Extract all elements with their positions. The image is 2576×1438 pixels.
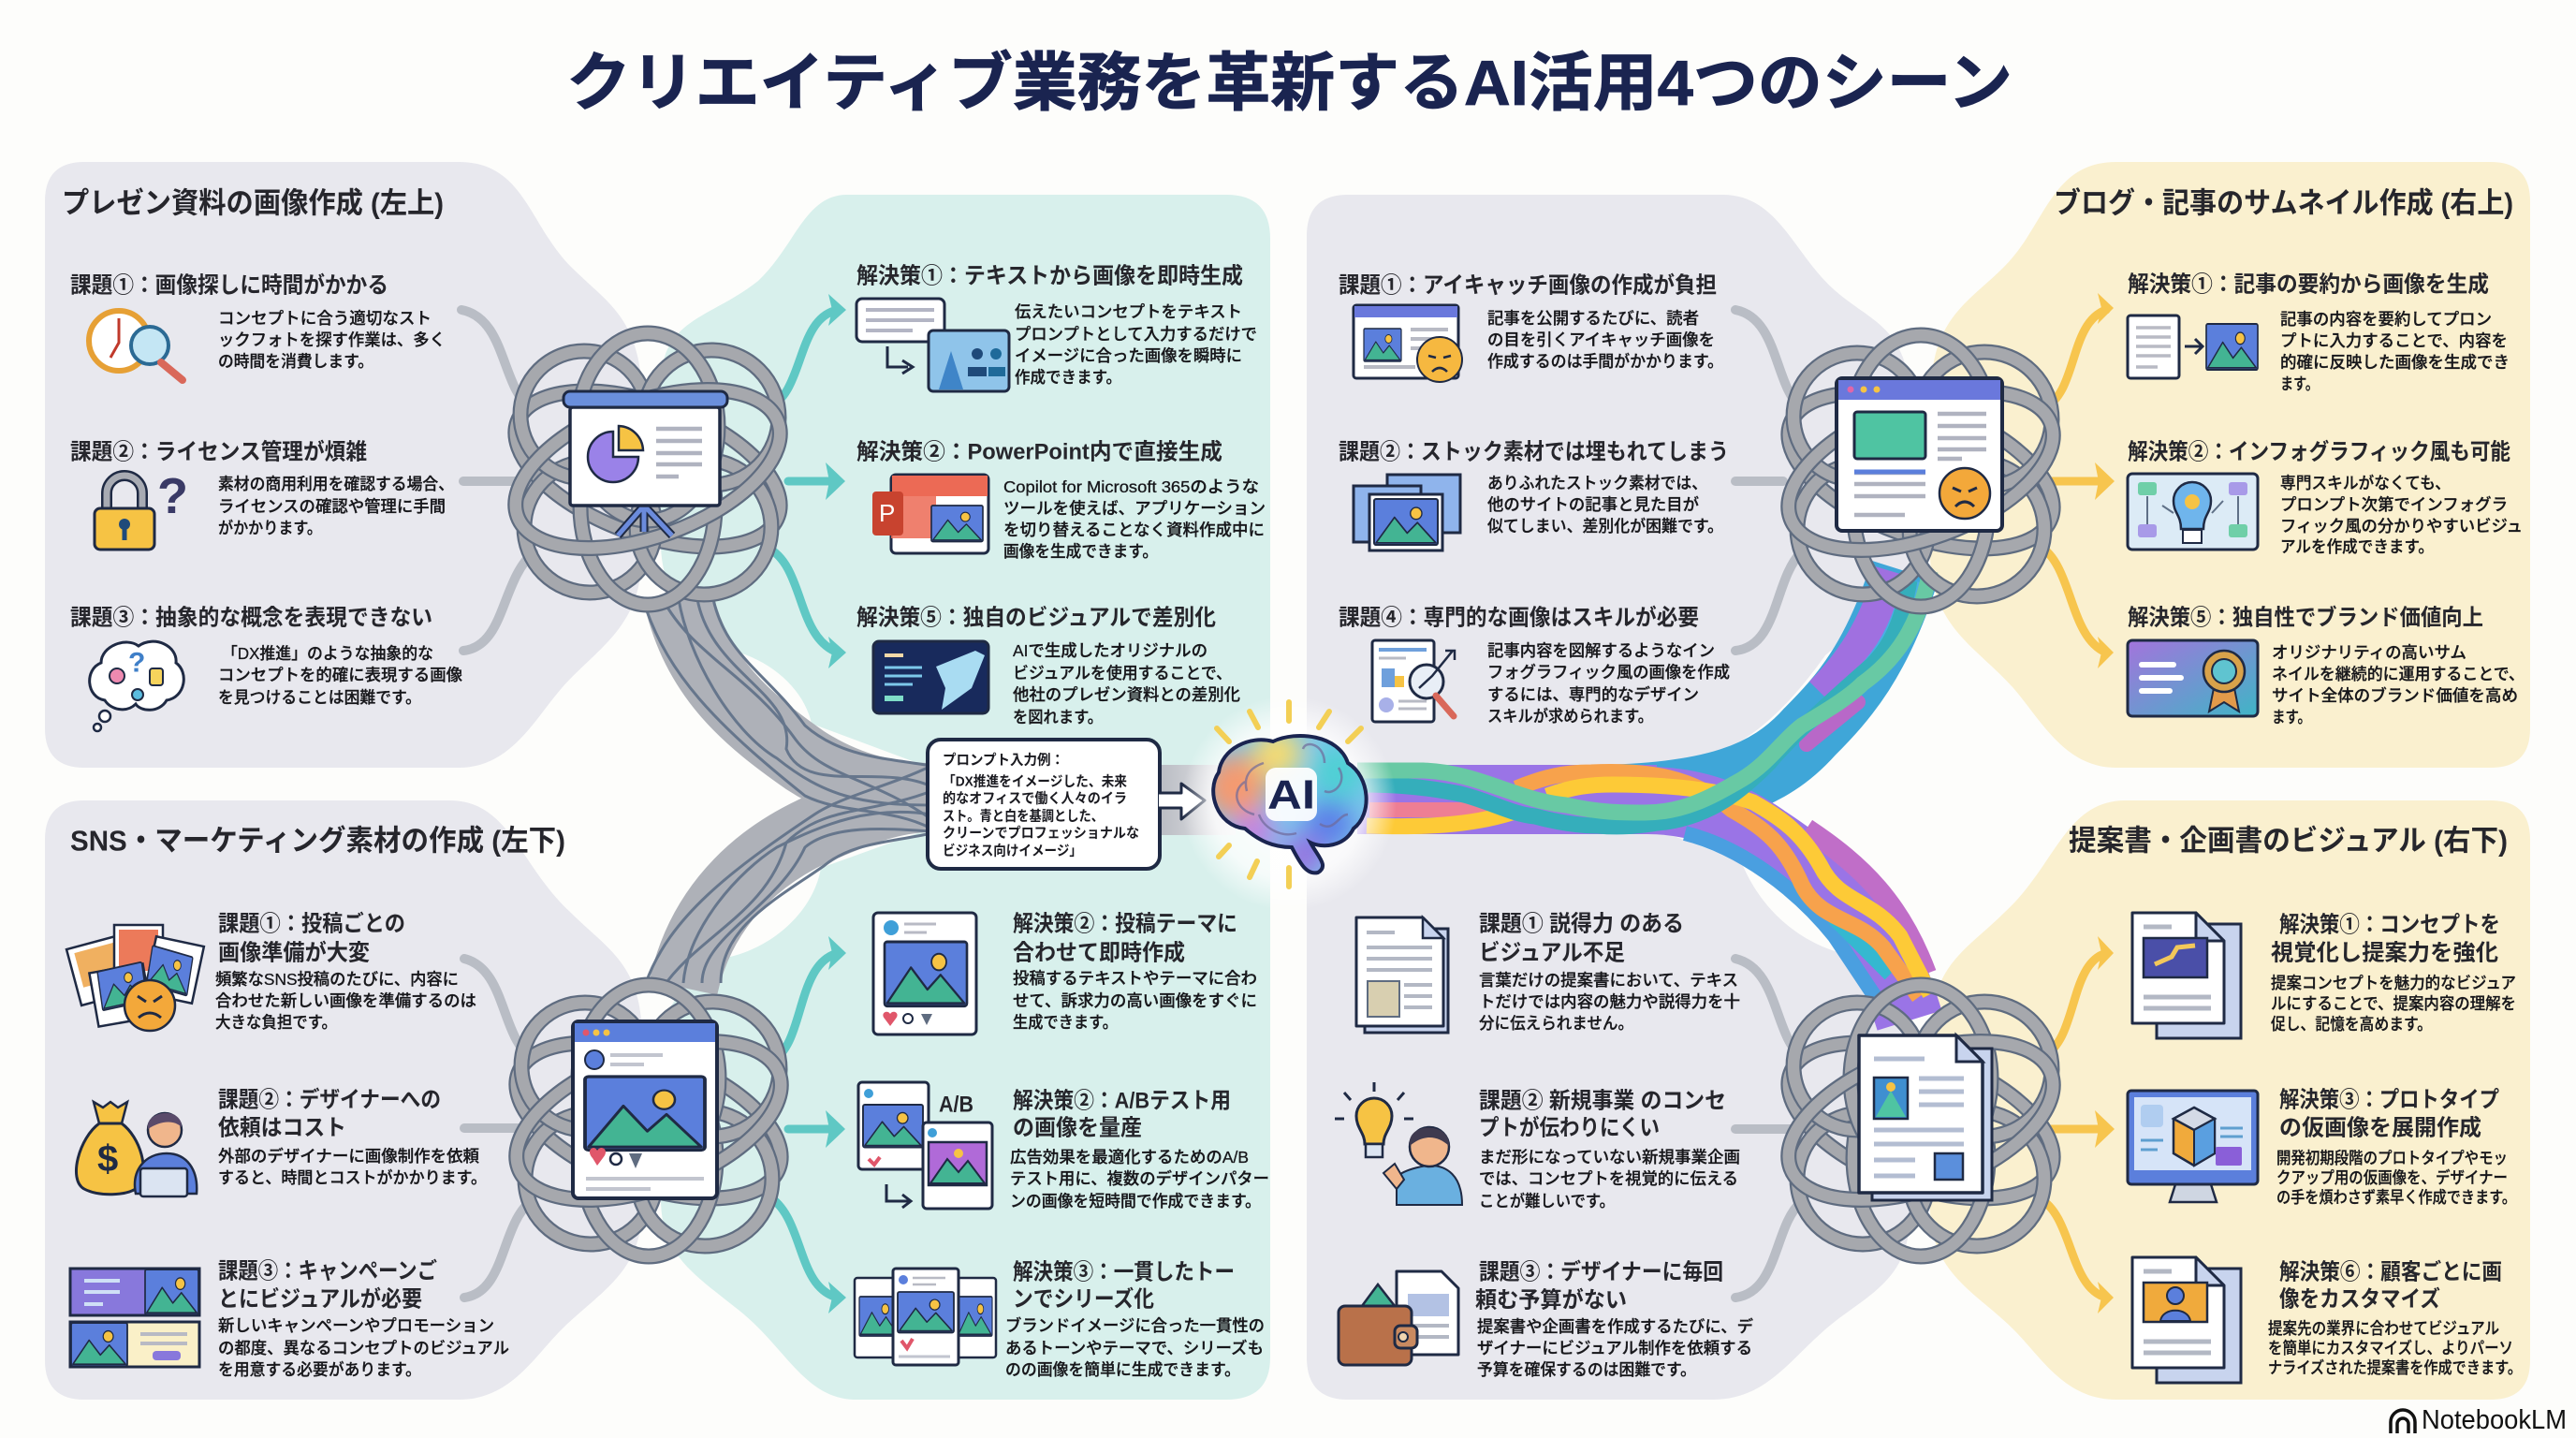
problem 3 (1339, 605, 1730, 726)
solution 3: 解決策⑤：独自性でブランド価値向上 (2128, 605, 2483, 631)
problem 1: 画像準備が大変 (218, 940, 370, 966)
problem 3: フォグラフィック風の画像を作成 (1487, 663, 1730, 682)
solution 1: プロンプトとして入力するだけで (1015, 325, 1257, 344)
icon: wallet and document (1339, 1271, 1458, 1365)
section: SNS problems (bottom-left) (66, 824, 565, 1379)
solution 1: 視覚化し提案力を強化 (2271, 940, 2498, 966)
problem 2: ことが難しいです。 (1479, 1192, 1615, 1211)
problem 2: 外部のデザイナーに画像制作を依頼 (218, 1147, 479, 1166)
problem 2: 依頼はコスト (218, 1116, 346, 1140)
icon: series of cards (855, 1269, 996, 1365)
icon: clock and magnifier (89, 311, 183, 380)
problem 3: コンセプトを的確に表現する画像 (218, 666, 462, 684)
icon: money bag and person (76, 1102, 197, 1196)
solution 3: あるトーンやテーマで、シリーズも (1005, 1339, 1264, 1357)
problem 3 (70, 605, 462, 731)
problem 3: 課題③：キャンペーンご (218, 1258, 437, 1284)
prompt text: クリーンでプロフェッショナルな (943, 826, 1139, 841)
icon: lock (95, 468, 188, 550)
icon: document (1356, 917, 1448, 1033)
icon: window with sad face (1354, 305, 1462, 382)
problem 3: 課題③：抽象的な概念を表現できない (70, 605, 432, 631)
icon: customised document (2132, 1257, 2241, 1383)
solution 3: ナライズされた提案書を作成できます。 (2268, 1358, 2522, 1377)
problem 2: ライセンスの確認や管理に手間 (218, 497, 446, 516)
solution 2: 画像を生成できます。 (1003, 542, 1158, 561)
central icon: presentation board (564, 391, 727, 536)
problem 2: 課題②：ライセンス管理が煩雑 (70, 438, 367, 464)
solution 1: 記事の内容を要約してプロン (2280, 310, 2492, 329)
AI label: AI (1267, 771, 1315, 818)
solution 3: ネイルを継続的に運用することで、 (2272, 665, 2525, 683)
icon: text to image (856, 299, 1009, 391)
icon: money bag and person: $ (97, 1138, 118, 1180)
solution 2: フィック風の分かりやすいビジュ (2280, 517, 2523, 536)
solution 2: Copilot for Microsoft 365のような (1003, 477, 1259, 496)
central icon: social post card (573, 1021, 717, 1198)
problem 3: とにビジュアルが必要 (218, 1286, 422, 1313)
section: SNS solutions (bottom-left) (855, 912, 1269, 1379)
solution 2: 専門スキルがなくても、 (2280, 474, 2451, 492)
rainbow strands from brain to right knots (1357, 571, 1930, 1020)
solution 2: クアップ用の仮画像を、デザイナー (2276, 1168, 2508, 1187)
heading: プレゼン資料の画像作成 (左上) (62, 187, 444, 219)
solution 2: プロンプト次第でインフォグラ (2280, 495, 2508, 514)
icon: infographic card with bulb (2128, 474, 2258, 550)
problem 2 (70, 438, 454, 550)
solution 2 (856, 440, 1266, 561)
solution 1: プトに入力することで、内容を (2280, 331, 2508, 350)
solution 3 (2132, 1257, 2522, 1383)
solution 3: を簡単にカスタマイズし、よりパーソ (2268, 1339, 2513, 1357)
problem 1: 課題①：アイキャッチ画像の作成が負担 (1339, 271, 1717, 298)
problem 1: 課題① 説得力 のある (1479, 912, 1684, 936)
solution 3 (855, 1260, 1265, 1379)
solution 3: 像をカスタマイズ (2279, 1286, 2440, 1313)
problem 1: 言葉だけの提案書において、テキス (1479, 971, 1738, 990)
solution 1 (873, 912, 1257, 1034)
icon: infographic with magnifier (1372, 640, 1455, 722)
icon: bulb and person (1335, 1082, 1462, 1205)
problem 3: 頼む予算がない (1475, 1286, 1627, 1313)
icon: A/B test cards: A/B (939, 1092, 973, 1118)
section: presentation solutions (top-left) (856, 264, 1266, 726)
prompt text: ビジネス向けイメージ」 (943, 843, 1082, 859)
prompt text: スト。青と白を基調とした、 (943, 807, 1104, 824)
icon: photos with angry face (66, 925, 204, 1031)
problem 2 (76, 1086, 487, 1196)
panel background: top-right solutions (1930, 162, 2530, 768)
icon: PowerPoint slide (872, 475, 988, 553)
problem 3: ザイナーにビジュアル制作を依頼する (1477, 1339, 1752, 1357)
problem 2: プトが伝わりにくい (1479, 1114, 1660, 1140)
solution 2: の仮画像を展開作成 (2279, 1116, 2481, 1140)
problem 2: 素材の商用利用を確認する場合、 (218, 475, 454, 493)
problem 1: 記事を公開するたびに、読者 (1487, 309, 1699, 328)
icon: PowerPoint slide: P (879, 499, 895, 527)
section: proposal solutions (bottom-right) (2069, 824, 2522, 1383)
problem 1: 分に伝えられません。 (1479, 1014, 1633, 1033)
solution 1: 促し、記憶を高めます。 (2271, 1015, 2432, 1034)
solution 1: 解決策②：投稿テーマに (1013, 912, 1237, 936)
prompt text: 「DX推進をイメージした、未来 (943, 773, 1127, 790)
solution 1: 作成できます。 (1015, 368, 1121, 387)
problem 2: 課題②：ストック素材では埋もれてしまう (1339, 440, 1729, 464)
solution 3: のの画像を簡単に生成できます。 (1005, 1360, 1240, 1379)
solution 1: イメージに合った画像を瞬時に (1015, 346, 1242, 365)
problem 2: ありふれたストック素材では、 (1487, 474, 1707, 492)
problem 3: 課題③：デザイナーに毎回 (1479, 1258, 1723, 1284)
solution 2 (2128, 438, 2523, 556)
icon: thought cloud: ? (128, 648, 145, 678)
problem 2: まだ形になっていない新規事業企画 (1479, 1148, 1740, 1167)
solution 3: 解決策⑤：独自のビジュアルで差別化 (856, 605, 1216, 631)
connector lines: bottom-left (464, 936, 846, 1313)
panel background: top-left problems (45, 162, 642, 768)
solution 2 (858, 1082, 1269, 1211)
heading: 提案書・企画書のビジュアル (右下) (2069, 824, 2508, 858)
panel background: right problems (1307, 195, 1910, 1400)
solution 2: ンの画像を短時間で作成できます。 (1010, 1192, 1261, 1211)
tangled ropes from left knots to the prompt (646, 599, 931, 988)
problem 1 (70, 271, 446, 380)
panel background: bottom-left problems (45, 800, 642, 1400)
solution 3: 他社のプレゼン資料との差別化 (1013, 685, 1240, 704)
central icon: blog window with angry face (1837, 378, 2002, 531)
problem 3: を用意する必要があります。 (218, 1360, 421, 1379)
solution 3: 解決策③：一貫したトー (1013, 1260, 1235, 1284)
problem 1: コンセプトに合う適切なスト (218, 309, 432, 328)
problem 2: では、コンセプトを視覚的に伝える (1479, 1169, 1738, 1188)
solution 1: 解決策①：記事の要約から画像を生成 (2128, 271, 2489, 298)
solution 2: を切り替えることなく資料作成中に (1003, 521, 1265, 539)
problem 3: 「DX推進」のような抽象的な (222, 644, 433, 663)
solution 1: 解決策①：コンセプトを (2279, 912, 2500, 938)
solution 1: ます。 (2280, 374, 2319, 393)
solution 1: 生成できます。 (1013, 1013, 1118, 1032)
problem 1 (66, 910, 476, 1032)
problem 3: の都度、異なるコンセプトのビジュアル (218, 1339, 509, 1357)
solution 2: 解決策②：インフォグラフィック風も可能 (2128, 438, 2510, 464)
solution 3: AIで生成したオリジナルの (1013, 641, 1208, 660)
problem 1: の目を引くアイキャッチ画像を (1487, 330, 1715, 349)
prompt text: プロンプト入力例： (943, 753, 1064, 768)
icon: brand card with badge (2128, 640, 2258, 716)
prompt text (943, 753, 1139, 859)
solution 3 (2128, 605, 2525, 726)
problem 1: 作成するのは手間がかかります。 (1487, 352, 1723, 371)
solution 2: 解決策③：プロトタイプ (2279, 1088, 2499, 1112)
panel background: left solutions (661, 195, 1270, 1400)
solution 1: 解決策①：テキストから画像を即時生成 (856, 264, 1243, 288)
problem 3: 予算を確保するのは困難です。 (1477, 1360, 1696, 1379)
problem 1: トだけでは内容の魅力や説得力を十 (1479, 992, 1740, 1011)
problem 3: 課題④：専門的な画像はスキルが必要 (1339, 605, 1699, 631)
icon: monitor with 3D box (2128, 1091, 2258, 1202)
solution 3: を図れます。 (1013, 708, 1103, 726)
problem 1: 課題①：画像探しに時間がかかる (70, 271, 388, 298)
knot: bottom-left (495, 985, 802, 1256)
heading: ブログ・記事のサムネイル作成 (右上) (2054, 187, 2513, 219)
problem 2 (1339, 440, 1729, 550)
prompt text: 的なオフィスで働く人々のイラ (943, 790, 1127, 807)
solution 2: 解決策②：A/Bテスト用 (1013, 1088, 1231, 1114)
knot: top-right (1767, 335, 2074, 607)
icon: stacked stock images (1354, 475, 1460, 550)
problem 2 (1335, 1082, 1740, 1211)
connector lines: top-left (461, 294, 846, 668)
problem 1: ックフォトを探す作業は、多く (218, 330, 446, 349)
title: クリエイティブ業務を革新するAI活用4つのシーン (566, 48, 2012, 119)
problem 2: がかかります。 (218, 519, 322, 537)
solution 1: せて、訴求力の高い画像をすぐに (1013, 991, 1257, 1010)
solution 1 (2128, 271, 2510, 393)
solution 2: の手を煩わさず素早く作成できます。 (2276, 1188, 2516, 1207)
problem 1: 合わせた新しい画像を準備するのは (215, 991, 476, 1010)
problem 1 (1356, 912, 1740, 1033)
solution 1: 投稿するテキストやテーマに合わ (1013, 969, 1257, 988)
knot: top-left (494, 333, 801, 605)
solution 2: 広告効果を最適化するためのA/B (1010, 1148, 1249, 1167)
gray band from prompt to brain (1160, 765, 1236, 835)
solution 2: 開発初期段階のプロトタイプやモッ (2276, 1149, 2508, 1167)
solution 3: ンでシリーズ化 (1013, 1286, 1154, 1313)
connector lines: bottom-right (1735, 936, 2115, 1313)
solution 2 (2128, 1088, 2516, 1207)
prompt input box (928, 740, 1160, 869)
problem 2: 課題② 新規事業 のコンセ (1479, 1088, 1726, 1114)
problem 1: 大きな負担です。 (215, 1013, 337, 1032)
problem 3: するには、専門的なデザイン (1487, 685, 1699, 704)
icon: social post (873, 913, 976, 1034)
solution 2: 解決策②：PowerPoint内で直接生成 (856, 440, 1222, 464)
problem 3 (1339, 1258, 1753, 1379)
icon: thought cloud (90, 641, 183, 731)
problem 2: 似てしまい、差別化が困難です。 (1487, 517, 1723, 536)
solution 1: 伝えたいコンセプトをテキスト (1015, 302, 1242, 321)
solution 3: 提案先の業界に合わせてビジュアル (2268, 1319, 2499, 1338)
icon: article to image (2128, 315, 2258, 378)
solution 2: アルを作成できます。 (2280, 537, 2434, 556)
solution 3: オリジナリティの高いサム (2272, 643, 2466, 662)
solution 3: 解決策⑥：顧客ごとに画 (2279, 1258, 2502, 1284)
solution 2: ツールを使えば、アプリケーション (1003, 499, 1266, 518)
solution 1: ルにすることで、提案内容の理解を (2271, 994, 2516, 1013)
knot: bottom-right (1767, 985, 2074, 1256)
solution 3 (856, 605, 1240, 726)
solution 3: ます。 (2272, 708, 2311, 726)
problem 1: 課題①：投稿ごとの (218, 910, 405, 936)
solution 1: 合わせて即時作成 (1013, 940, 1185, 966)
icon: campaign banners (70, 1269, 199, 1367)
problem 2: 他のサイトの記事と見た目が (1487, 495, 1699, 514)
problem 1 (1339, 271, 1723, 382)
problem 3 (70, 1258, 509, 1379)
connector lines: top-right (1735, 293, 2115, 668)
problem 3: 記事内容を図解するようなイン (1487, 641, 1715, 660)
solution 3: サイト全体のブランド価値を高め (2272, 686, 2518, 705)
solution 2: テスト用に、複数のデザインパター (1010, 1169, 1269, 1188)
problem 1: の時間を消費します。 (218, 352, 373, 371)
solution 1 (856, 264, 1257, 391)
solution 1 (2132, 912, 2516, 1038)
solution 1: 的確に反映した画像を生成でき (2280, 353, 2510, 372)
section: blog thumbnail solutions (top-right) (2054, 187, 2525, 726)
problem 3: 新しいキャンペーンやプロモーション (218, 1316, 494, 1335)
solution 3: ブランドイメージに合った一貫性の (1005, 1316, 1265, 1335)
problem 1: 頻繁なSNS投稿のたびに、内容に (215, 970, 459, 989)
problem 3: を見つけることは困難です。 (218, 688, 421, 707)
icon: dark visual card (873, 641, 988, 713)
heading: SNS・マーケティング素材の作成 (左下) (70, 824, 565, 858)
solution 2: の画像を量産 (1013, 1116, 1142, 1140)
problem 2: すると、時間とコストがかかります。 (218, 1168, 487, 1187)
NotebookLM logo: NotebookLM (2422, 1405, 2567, 1435)
problem 3: スキルが求められます。 (1487, 707, 1653, 726)
problem 2: 課題②：デザイナーへの (218, 1086, 441, 1112)
arrow from prompt to brain (1159, 784, 1205, 819)
icon: proposal document with image (2132, 913, 2241, 1038)
solution 1: 提案コンセプトを魅力的なビジュア (2271, 974, 2516, 992)
AI brain (1181, 696, 1397, 911)
problem 3: 提案書や企画書を作成するたびに、デ (1477, 1317, 1753, 1336)
icon: lock: ? (157, 468, 188, 524)
section: proposal problems (bottom-right) (1335, 912, 1753, 1379)
icon: A/B test cards (858, 1082, 992, 1209)
solution 3: ビジュアルを使用することで、 (1013, 664, 1232, 682)
problem 1: ビジュアル不足 (1479, 940, 1625, 966)
central icon: proposal document (1859, 1035, 1992, 1200)
section: blog thumbnail problems (top-right) (1339, 271, 1730, 726)
panel background: bottom-right solutions (1930, 800, 2530, 1400)
section: presentation problems (top-left) (62, 187, 462, 731)
